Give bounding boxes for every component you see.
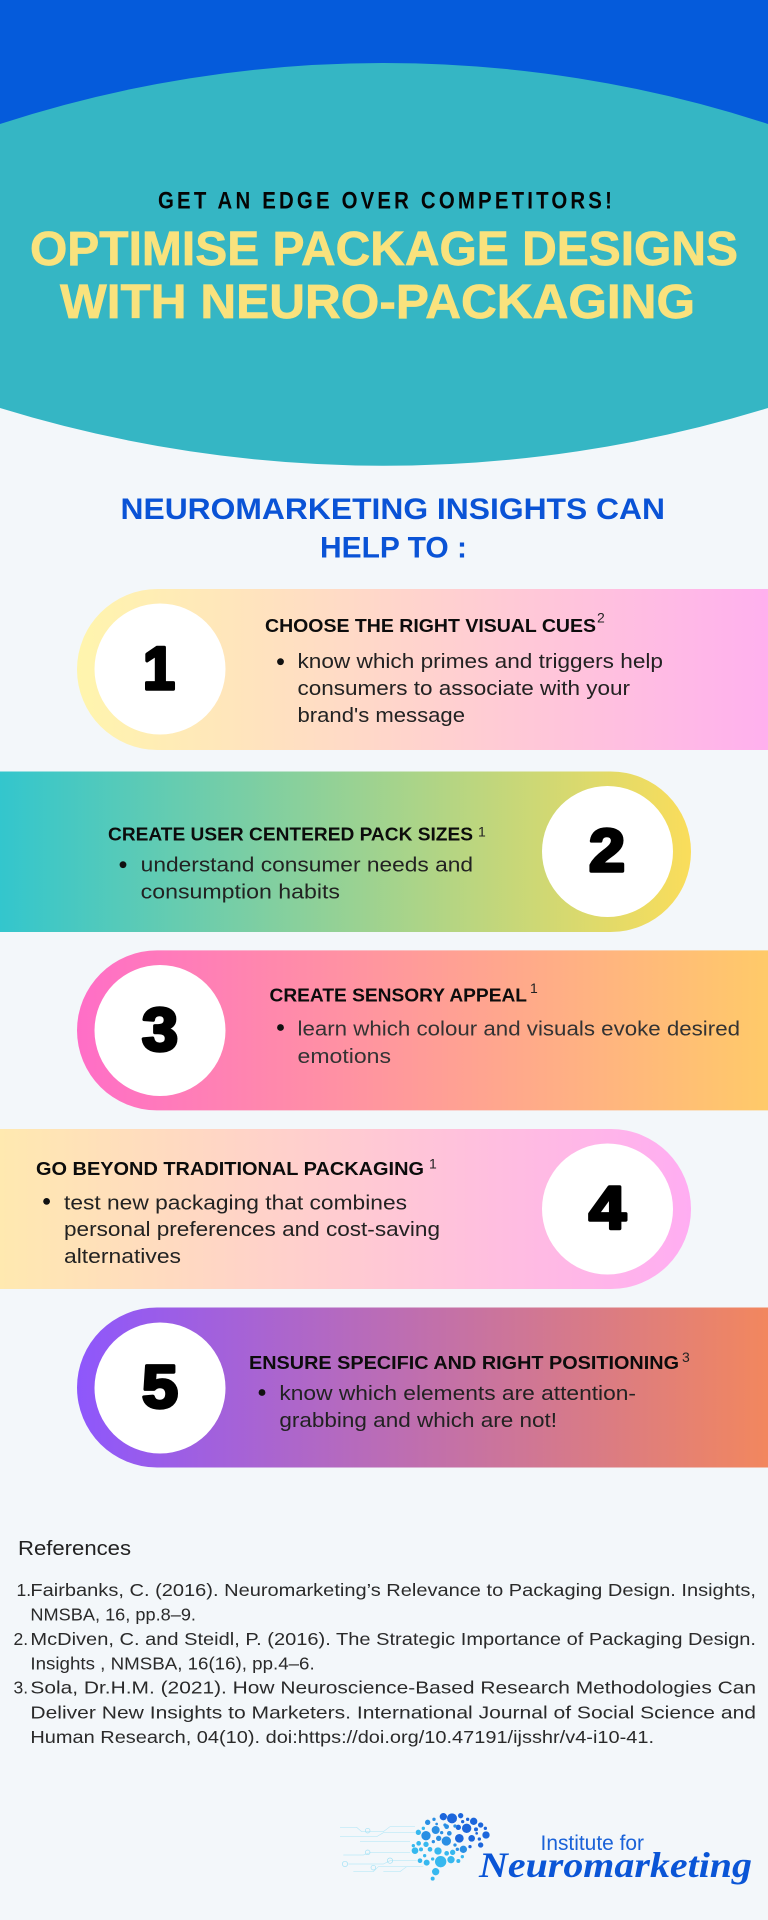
step 5 bullet — [259, 1383, 636, 1432]
reference 3: Sola, Dr.H.M. (2021). How Neuroscience-Based Research Methodologies Can — [30, 1678, 756, 1698]
step 3 heading: 1 — [530, 980, 538, 996]
reference 1: NMSBA, 16, pp.8–9. — [30, 1605, 196, 1625]
header text — [30, 187, 738, 329]
header band — [0, 0, 768, 466]
number badge 5 — [94, 1322, 226, 1454]
references heading: References — [18, 1538, 131, 1560]
panel: step 3 sensory appeal — [77, 950, 768, 1110]
section heading: HELP TO : — [320, 532, 467, 564]
reference 3: Human Research, 04(10). doi:https://doi.org/10.47191/ijsshr/v4-i10-41. — [30, 1727, 654, 1747]
step 3 bullet: learn which colour and visuals evoke desired — [298, 1018, 740, 1040]
step 3 heading: CREATE SENSORY APPEAL — [270, 984, 527, 1005]
title line 1: OPTIMISE PACKAGE DESIGNS — [30, 223, 738, 276]
step 1 heading: CHOOSE THE RIGHT VISUAL CUES — [265, 615, 596, 636]
step 2 heading: CREATE USER CENTERED PACK SIZES — [108, 824, 473, 845]
logo: Institute for Neuromarketing — [340, 1813, 752, 1885]
step 1 bullet: know which primes and triggers help — [298, 651, 663, 673]
logo wordmark: Institute for — [540, 1832, 644, 1855]
step 4 bullet: alternatives — [64, 1246, 181, 1268]
panel: step 4 beyond traditional packaging — [0, 1129, 691, 1289]
step 4 bullet: test new packaging that combines — [64, 1192, 407, 1214]
step 2 heading: 1 — [478, 824, 486, 840]
section heading: NEUROMARKETING INSIGHTS CAN — [120, 493, 665, 526]
logo wordmark — [478, 1832, 752, 1885]
step 4 heading: GO BEYOND TRADITIONAL PACKAGING — [36, 1158, 424, 1179]
references — [14, 1538, 756, 1747]
panel: step 1 visual cues — [77, 589, 768, 750]
step 4 bullet: personal preferences and cost-saving — [64, 1219, 440, 1241]
step 5 heading: ENSURE SPECIFIC AND RIGHT POSITIONING — [249, 1352, 679, 1373]
step 1 bullet: consumers to associate with your — [298, 678, 630, 700]
kicker: GET AN EDGE OVER COMPETITORS! — [158, 187, 612, 214]
step 3 bullet: emotions — [298, 1046, 391, 1068]
logo wordmark: Neuromarketing — [478, 1845, 752, 1885]
step 4 bullet — [43, 1192, 440, 1268]
number badge 4 — [542, 1144, 673, 1274]
step 5 bullet: know which elements are attention- — [279, 1383, 636, 1405]
number badge 1 — [94, 604, 226, 734]
reference 3: 3. — [14, 1678, 28, 1698]
title line 2: WITH NEURO-PACKAGING — [60, 276, 695, 329]
panel: step 5 positioning — [77, 1308, 768, 1468]
number badge 2 — [542, 786, 673, 917]
step 2 bullet: understand consumer needs and — [141, 855, 473, 877]
step 1 bullet: brand's message — [298, 705, 465, 727]
panel: step 2 pack sizes — [0, 772, 691, 932]
reference 1 — [16, 1580, 756, 1625]
reference 3 — [14, 1678, 756, 1747]
teal curved banner — [0, 63, 768, 466]
number badge 1: 1 — [143, 635, 175, 702]
number badge 3 — [94, 965, 226, 1096]
reference 1: 1. — [16, 1580, 31, 1600]
icon: brain with circuit lines — [340, 1813, 489, 1880]
reference 1: Fairbanks, C. (2016). Neuromarketing’s Relevance to Packaging Design. Insights, — [30, 1580, 756, 1600]
number badge 4: 4 — [589, 1174, 627, 1242]
step 5 heading: 3 — [682, 1349, 690, 1365]
step 2 bullet: consumption habits — [141, 882, 340, 904]
step 1 heading: 2 — [597, 610, 605, 626]
step 1 bullet — [277, 651, 663, 727]
reference 2: 2. — [14, 1629, 28, 1649]
blue top band — [0, 0, 768, 200]
reference 2: McDiven, C. and Steidl, P. (2016). The Strategic Importance of Packaging Design. — [30, 1629, 756, 1649]
step 2 bullet — [120, 855, 473, 904]
reference 3: Deliver New Insights to Marketers. International Journal of Social Science and — [30, 1703, 756, 1723]
number badge 5: 5 — [142, 1354, 178, 1420]
number badge 2: 2 — [589, 817, 625, 884]
step 3 bullet — [277, 1018, 740, 1068]
section heading — [120, 493, 665, 564]
reference 2 — [14, 1629, 756, 1674]
step 4 heading: 1 — [429, 1156, 437, 1172]
number badge 3: 3 — [142, 996, 178, 1064]
step 5 bullet: grabbing and which are not! — [279, 1410, 557, 1432]
reference 2: Insights , NMSBA, 16(16), pp.4–6. — [30, 1654, 315, 1674]
